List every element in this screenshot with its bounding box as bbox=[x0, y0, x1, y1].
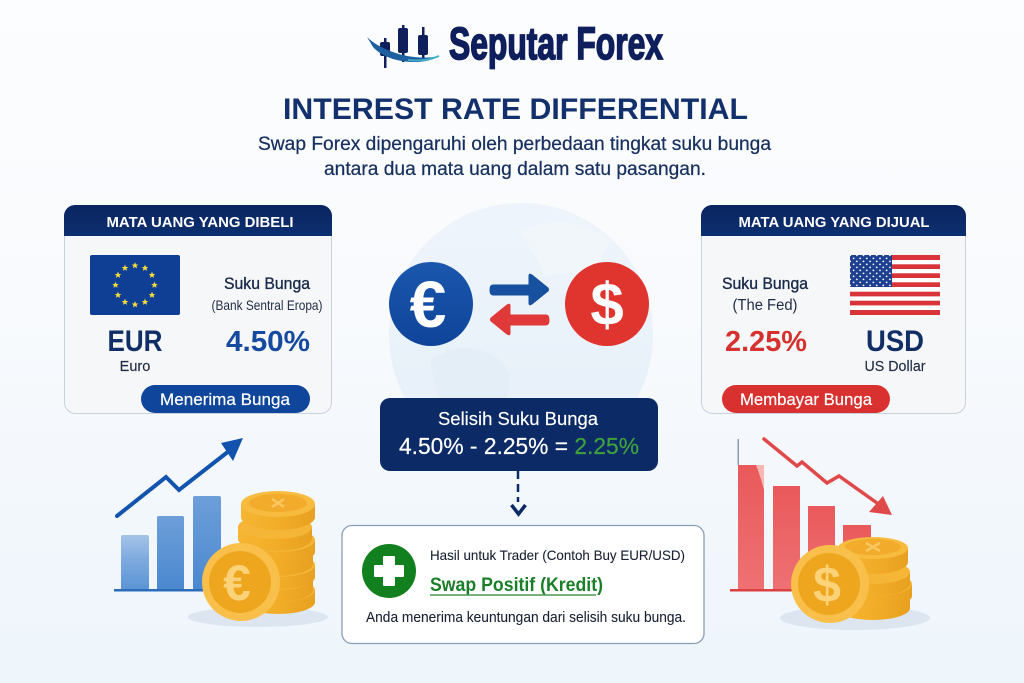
panel header bbox=[701, 205, 966, 236]
result description: Anda menerima keuntungan dari selisih suku bunga. bbox=[366, 610, 686, 626]
title: INTEREST RATE DIFFERENTIAL bbox=[283, 93, 748, 126]
arrow: rising trend bbox=[117, 438, 243, 516]
icon: green plus bbox=[362, 544, 416, 598]
rate value: 4.50% bbox=[226, 326, 310, 358]
result label: Hasil untuk Trader (Contoh Buy EUR/USD) bbox=[430, 547, 685, 563]
currency code USD: USD bbox=[866, 325, 924, 358]
rate source: (The Fed) bbox=[732, 297, 798, 314]
panel header: MATA UANG YANG DIJUAL bbox=[738, 215, 930, 231]
coin shadow bbox=[188, 607, 328, 627]
bars bbox=[730, 439, 871, 592]
badge: membayar bunga bbox=[722, 385, 890, 413]
panel: hasil untuk trader bbox=[342, 526, 704, 644]
callout: selisih suku bunga: 4.50% - 2.25% = 2.25% bbox=[399, 433, 639, 459]
subtitle: Swap Forex dipengaruhi oleh perbedaan tingkat suku bunga bbox=[258, 134, 771, 155]
chart: rising bars with euro coins bbox=[114, 438, 328, 627]
icon: dollar circle: $ bbox=[590, 271, 624, 338]
icon: candlesticks with swoosh bbox=[367, 25, 439, 68]
bars bbox=[114, 496, 221, 592]
result value: Swap Positif (Kredit) bbox=[430, 575, 603, 596]
coin stack bbox=[836, 537, 912, 620]
euro coin bbox=[202, 543, 280, 621]
rate label: Suku Bunga bbox=[224, 275, 311, 293]
rate value: 2.25% bbox=[725, 326, 807, 358]
subtitle: antara dua mata uang dalam satu pasangan. bbox=[324, 159, 706, 180]
arrow: falling trend bbox=[764, 439, 892, 515]
callout: selisih suku bunga: Selisih Suku Bunga bbox=[438, 409, 599, 429]
currency name: US Dollar bbox=[864, 359, 926, 375]
callout: selisih suku bunga bbox=[380, 398, 658, 471]
subtitle bbox=[258, 134, 771, 180]
badge: menerima bunga bbox=[141, 385, 310, 413]
icon: EU flag bbox=[90, 255, 180, 315]
coin shadow bbox=[780, 606, 930, 630]
icon: dollar circle bbox=[565, 262, 649, 346]
panel: mata uang yang dijual bbox=[701, 205, 966, 414]
icon: US flag bbox=[850, 255, 940, 315]
currency code EUR: EUR bbox=[108, 325, 163, 358]
rate label: Suku Bunga bbox=[722, 275, 809, 293]
badge: membayar bunga: Membayar Bunga bbox=[740, 390, 873, 409]
rate source: (Bank Sentral Eropa) bbox=[212, 297, 322, 313]
arrow: exchange left bbox=[490, 304, 549, 335]
globe backdrop bbox=[389, 203, 653, 467]
icon: euro circle: € bbox=[410, 267, 446, 341]
panel header bbox=[64, 205, 332, 236]
currency name: Euro bbox=[120, 359, 150, 375]
logo bbox=[367, 18, 663, 69]
euro coin: € bbox=[223, 555, 251, 611]
coin stack bbox=[238, 491, 315, 614]
icon: euro circle bbox=[389, 262, 473, 346]
logo wordmark: Seputar Forex bbox=[449, 18, 663, 69]
chart: falling bars with dollar coins bbox=[730, 439, 930, 630]
panel header: MATA UANG YANG DIBELI bbox=[106, 215, 294, 231]
arrow: dashed down bbox=[512, 471, 526, 514]
arrow: exchange right bbox=[490, 274, 548, 305]
badge: menerima bunga: Menerima Bunga bbox=[160, 390, 291, 409]
dollar coin bbox=[791, 545, 869, 623]
dollar coin: $ bbox=[813, 557, 841, 613]
panel: mata uang yang dibeli bbox=[64, 205, 332, 414]
